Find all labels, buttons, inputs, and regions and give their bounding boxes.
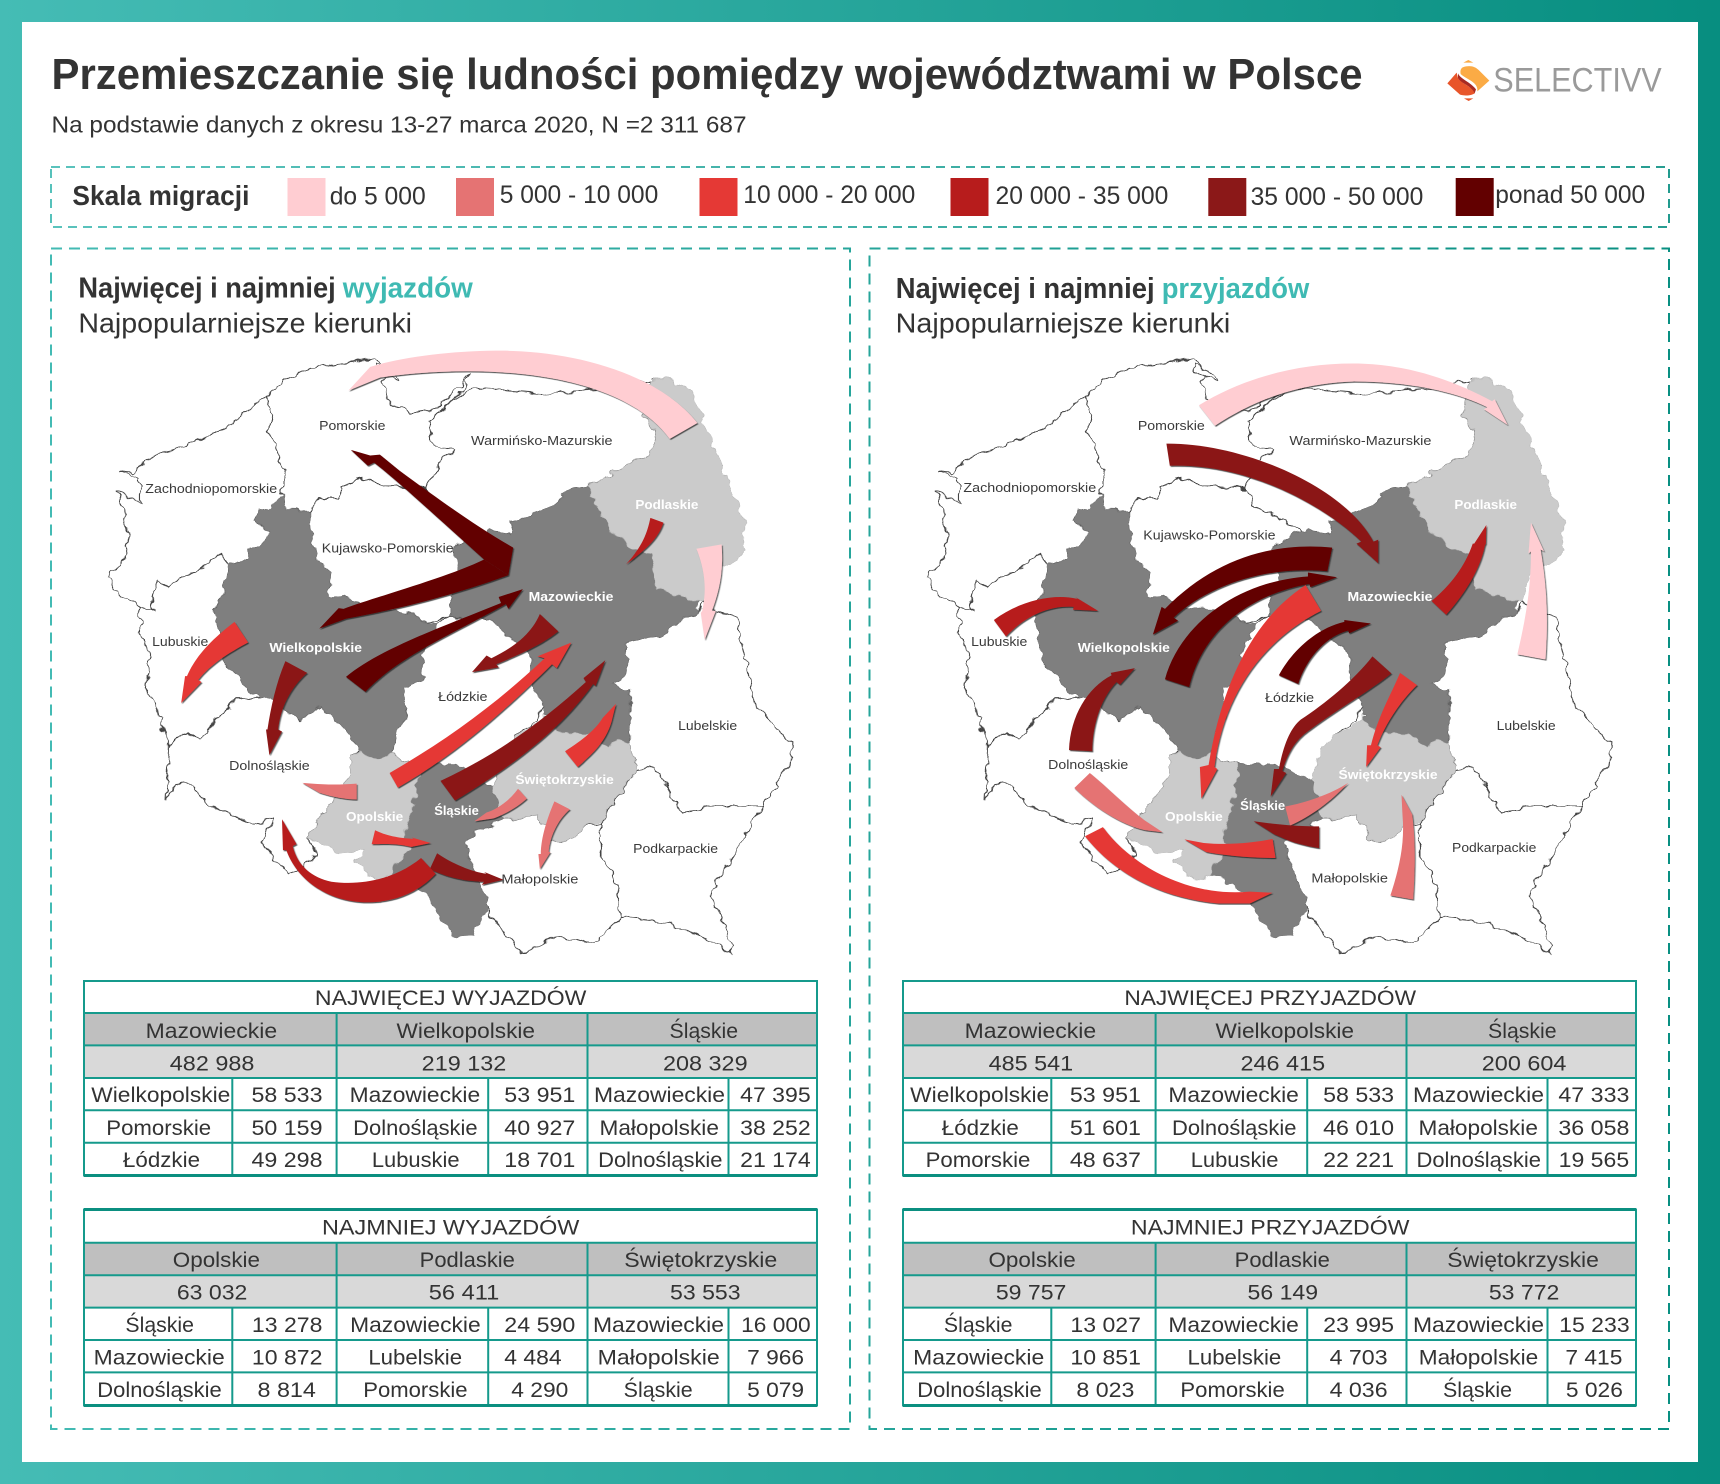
map labels: przyjazdy: Świętokrzyskie (1338, 767, 1438, 782)
table: najmniej wyjazdów: Dolnośląskie (97, 1379, 222, 1402)
table: najwięcej wyjazdów: Mazowieckie (146, 1020, 277, 1043)
table: najwięcej przyjazdów: Dolnośląskie (1172, 1117, 1296, 1140)
table: najmniej wyjazdów: NAJMNIEJ WYJAZDÓW (322, 1217, 580, 1240)
table: najwięcej wyjazdów: 49 298 (252, 1149, 322, 1172)
table: najwięcej przyjazdów: 53 951 (1070, 1084, 1141, 1107)
table: najmniej wyjazdów (84, 1210, 817, 1406)
table: najwięcej przyjazdów: Wielkopolskie (910, 1084, 1049, 1107)
table: najmniej przyjazdów: Podlaskie (1235, 1249, 1330, 1272)
map labels: wyjazdy: Podkarpackie (633, 841, 718, 856)
arrow: Mazowieckie to Śląskie (1271, 656, 1391, 797)
arrow: Wielkopolskie to Lubuskie (181, 622, 248, 703)
map labels: wyjazdy: Dolnośląskie (229, 758, 310, 773)
table: najmniej przyjazdów: Świętokrzyskie (1447, 1248, 1599, 1272)
heading: wyjazdy: Najpopularniejsze kierunki (78, 308, 412, 338)
logo: Selectivv (1447, 60, 1662, 101)
arrow: Opolskie to Dolnośląskie (302, 783, 357, 799)
table: najmniej wyjazdów: 53 553 (670, 1282, 741, 1305)
arrow: Śląskie to Opolskie (1184, 839, 1275, 858)
arrow: Opolskie to Mazowieckie (390, 642, 571, 788)
table: najwięcej przyjazdów: Wielkopolskie (1216, 1020, 1354, 1043)
arrow: Śląskie to Mazowieckie (440, 660, 605, 801)
map labels: przyjazdy: Kujawsko-Pomorskie (1143, 528, 1276, 542)
table: najwięcej przyjazdów: 485 541 (989, 1052, 1073, 1075)
map labels: wyjazdy: Podlaskie (635, 497, 698, 512)
map labels: wyjazdy (145, 418, 737, 886)
regions (108, 358, 792, 954)
table: najmniej wyjazdów: 8 814 (258, 1379, 316, 1402)
map labels: przyjazdy: Małopolskie (1311, 870, 1388, 886)
table: najmniej przyjazdów: 53 772 (1489, 1282, 1559, 1305)
map labels: przyjazdy: Śląskie (1240, 798, 1285, 813)
table: najmniej przyjazdów: Pomorskie (1180, 1379, 1285, 1402)
table: najmniej przyjazdów: NAJMNIEJ PRZYJAZDÓW (1131, 1217, 1410, 1240)
table: najwięcej wyjazdów: 53 951 (504, 1084, 575, 1107)
table: najwięcej wyjazdów: 50 159 (252, 1117, 322, 1140)
table: najwięcej wyjazdów: 21 174 (740, 1149, 811, 1172)
table: najmniej wyjazdów: 4 484 (504, 1347, 562, 1370)
arrow: Lubelskie to Podlaskie (1517, 523, 1547, 659)
arrow: Małopolskie to Śląskie (1254, 821, 1319, 848)
table: najmniej wyjazdów: 56 411 (429, 1282, 499, 1305)
title: Przemieszczanie się ludności pomiędzy województwami w Polsce (52, 50, 1362, 99)
table: najwięcej wyjazdów: Dolnośląskie (353, 1117, 478, 1140)
table: najmniej przyjazdów: 56 149 (1248, 1282, 1318, 1305)
table: najwięcej wyjazdów: 58 533 (252, 1084, 322, 1107)
map labels: przyjazdy: Podkarpackie (1452, 840, 1536, 855)
table: najmniej przyjazdów: 8 023 (1076, 1379, 1134, 1402)
map labels: przyjazdy: Mazowieckie (1348, 589, 1432, 604)
table: najmniej przyjazdów: Lubelskie (1188, 1347, 1281, 1370)
map labels: wyjazdy: Zachodniopomorskie (145, 481, 277, 496)
table: najmniej przyjazdów: 4 703 (1330, 1347, 1388, 1370)
table: najmniej wyjazdów: 63 032 (177, 1282, 247, 1305)
table: najwięcej wyjazdów: Wielkopolskie (397, 1020, 535, 1043)
table: najmniej wyjazdów: 7 966 (747, 1347, 804, 1370)
table: najwięcej przyjazdów: 47 333 (1558, 1084, 1629, 1107)
table: najmniej przyjazdów: Mazowieckie (1168, 1314, 1299, 1337)
table: najmniej przyjazdów: Dolnośląskie (917, 1379, 1042, 1402)
table: najmniej przyjazdów: Opolskie (988, 1249, 1076, 1272)
table: najmniej wyjazdów: Podlaskie (420, 1249, 515, 1272)
map labels: wyjazdy: Śląskie (434, 803, 479, 818)
table: najwięcej wyjazdów: Lubuskie (372, 1149, 460, 1172)
panel: przyjazdy (870, 248, 1669, 1429)
legend item: ponad 50 000: ponad 50 000 (1495, 181, 1645, 209)
table: najmniej przyjazdów: Mazowieckie (913, 1347, 1044, 1370)
heading: wyjazdy: Najwięcej i najmniej (78, 273, 336, 305)
arrows (994, 364, 1547, 903)
table: najwięcej przyjazdów: 46 010 (1323, 1117, 1394, 1140)
map labels: wyjazdy: Lubelskie (678, 718, 737, 733)
table: najwięcej przyjazdów: Dolnośląskie (1416, 1149, 1541, 1172)
table: najwięcej przyjazdów: Mazowieckie (1413, 1084, 1544, 1107)
arrow: Pomorskie to Podlaskie (1199, 364, 1508, 426)
heading: wyjazdy: wyjazdów (342, 273, 474, 305)
table: najwięcej przyjazdów: Lubuskie (1191, 1149, 1278, 1172)
table: najmniej przyjazdów: 7 415 (1565, 1347, 1622, 1370)
table: najwięcej wyjazdów: 40 927 (504, 1117, 575, 1140)
legend panel: Skala migracji (51, 167, 1669, 227)
arrow: Mazowieckie to Wielkopolskie (319, 559, 508, 629)
table: najmniej przyjazdów: 59 757 (996, 1282, 1066, 1305)
arrows (181, 351, 722, 902)
table: najwięcej przyjazdów: 22 221 (1323, 1149, 1394, 1172)
table: najwięcej przyjazdów: 51 601 (1070, 1117, 1141, 1140)
table: najmniej przyjazdów (903, 1210, 1636, 1406)
arrow: Pomorskie to Mazowieckie (1166, 444, 1378, 563)
table: najwięcej wyjazdów: Małopolskie (600, 1117, 719, 1140)
arrow: Mazowieckie to Wielkopolskie (1153, 546, 1332, 635)
table: najwięcej wyjazdów: Łódzkie (123, 1149, 200, 1172)
arrow: Dolnośląskie to Wielkopolskie (1069, 668, 1135, 751)
table: najmniej wyjazdów: 16 000 (741, 1314, 811, 1337)
table: najmniej przyjazdów: 15 233 (1559, 1314, 1630, 1337)
arrow: Wielkopolskie to Mazowieckie (1165, 572, 1337, 687)
table: najmniej wyjazdów: Śląskie (125, 1313, 194, 1337)
map labels: przyjazdy: Wielkopolskie (1078, 640, 1170, 655)
table: najmniej przyjazdów: 5 026 (1566, 1379, 1623, 1402)
map labels: przyjazdy: Pomorskie (1138, 418, 1205, 433)
heading: przyjazdy: przyjazdów (1162, 273, 1310, 305)
arrow: Świętokrzyskie to Śląskie (1285, 783, 1348, 826)
map labels: wyjazdy: Lubuskie (152, 634, 208, 649)
arrow: Świętokrzyskie to Małopolskie (538, 801, 570, 869)
heading: wyjazdy (78, 273, 474, 338)
table: najmniej wyjazdów: Mazowieckie (94, 1347, 225, 1370)
table: najwięcej wyjazdów: Mazowieckie (594, 1084, 725, 1107)
map: przyjazdy (927, 358, 1611, 954)
legend item: 5 000 - 10 000: 5 000 - 10 000 (500, 181, 658, 209)
arrow: Opolskie to Śląskie (372, 830, 431, 847)
legend title: Skala migracji (72, 180, 249, 211)
arrow: Mazowieckie to Pomorskie (351, 450, 513, 575)
arrow: Świętokrzyskie to Śląskie (474, 789, 527, 821)
map: wyjazdy (108, 351, 792, 954)
map labels: przyjazdy: Warmińsko-Mazurskie (1289, 433, 1431, 448)
table: najmniej wyjazdów: Mazowieckie (350, 1314, 481, 1337)
arrow: Wielkopolskie to Mazowieckie (346, 589, 523, 692)
table: najmniej wyjazdów: Śląskie (624, 1378, 693, 1402)
table: najmniej wyjazdów: 4 290 (511, 1379, 568, 1402)
arrow: Podlaskie to Lubelskie (696, 544, 722, 640)
logo: Selectivv: SELECTIVV (1493, 62, 1662, 100)
arrow: Mazowieckie to Opolskie (1200, 585, 1321, 799)
arrow: Dolnośląskie to Śląskie (1085, 827, 1273, 903)
table: najwięcej przyjazdów: 19 565 (1559, 1149, 1629, 1172)
arrow: Świętokrzyskie to Mazowieckie (565, 704, 616, 767)
map labels: wyjazdy: Mazowieckie (529, 589, 613, 604)
table: najmniej przyjazdów: Mazowieckie (1413, 1314, 1544, 1337)
arrow: Podlaskie to Mazowieckie (626, 518, 663, 564)
table: najwięcej wyjazdów: 482 988 (170, 1052, 254, 1075)
arrow: Śląskie to Małopolskie (430, 853, 504, 885)
table: najwięcej wyjazdów: Wielkopolskie (91, 1084, 230, 1107)
table: najmniej wyjazdów: 10 872 (252, 1347, 322, 1370)
map labels: wyjazdy: Łódzkie (438, 689, 487, 704)
table: najwięcej przyjazdów: 36 058 (1558, 1117, 1629, 1140)
map labels: wyjazdy: Pomorskie (319, 418, 385, 433)
table: najwięcej przyjazdów: Pomorskie (926, 1149, 1030, 1172)
table: najwięcej wyjazdów: 208 329 (663, 1052, 748, 1075)
table: najmniej wyjazdów: Opolskie (173, 1249, 260, 1272)
table: najwięcej przyjazdów: Mazowieckie (965, 1020, 1096, 1043)
arrow: Dolnośląskie to Opolskie (1074, 773, 1163, 832)
table: najwięcej przyjazdów: 246 415 (1240, 1052, 1325, 1075)
arrow: Wielkopolskie to Dolnośląskie (266, 661, 307, 755)
arrow: Mazowieckie to Podlaskie (1432, 525, 1486, 615)
table: najmniej przyjazdów: Śląskie (1443, 1378, 1512, 1402)
heading: przyjazdy: Najwięcej i najmniej (896, 273, 1155, 305)
table: najwięcej wyjazdów: Śląskie (670, 1019, 738, 1043)
legend item: ponad 50 000 (1456, 178, 1645, 216)
heading: przyjazdy: Najpopularniejsze kierunki (896, 308, 1230, 338)
table: najwięcej przyjazdów: 200 604 (1482, 1052, 1567, 1075)
table: najwięcej przyjazdów: Małopolskie (1418, 1117, 1538, 1140)
table: najmniej przyjazdów: 10 851 (1070, 1347, 1141, 1370)
legend item: do 5 000: do 5 000 (330, 182, 426, 210)
heading: przyjazdy (896, 273, 1310, 338)
table: najwięcej wyjazdów (84, 981, 817, 1176)
legend item: 10 000 - 20 000: 10 000 - 20 000 (743, 181, 915, 209)
table: najmniej przyjazdów: 4 036 (1330, 1379, 1388, 1402)
table: najwięcej przyjazdów: 58 533 (1323, 1084, 1394, 1107)
table: najwięcej wyjazdów: Mazowieckie (350, 1084, 480, 1107)
table: najmniej wyjazdów: Lubelskie (368, 1347, 462, 1370)
map labels: wyjazdy: Małopolskie (501, 872, 578, 886)
arrow: Małopolskie to Świętokrzyskie (1390, 795, 1415, 899)
table: najwięcej wyjazdów: 38 252 (740, 1117, 811, 1140)
table: najwięcej przyjazdów: Łódzkie (942, 1117, 1019, 1140)
table: najmniej wyjazdów: 24 590 (504, 1314, 575, 1337)
table: najmniej przyjazdów: Małopolskie (1419, 1347, 1538, 1370)
table: najmniej wyjazdów: Świętokrzyskie (624, 1248, 777, 1272)
map labels: przyjazdy (963, 418, 1556, 886)
table: najmniej wyjazdów: Mazowieckie (593, 1314, 724, 1337)
panel: wyjazdy (51, 248, 850, 1429)
table: najmniej wyjazdów: 13 278 (252, 1314, 322, 1337)
table: najmniej wyjazdów: 5 079 (747, 1379, 804, 1402)
arrow: Śląskie to Dolnośląskie (282, 819, 436, 902)
table: najwięcej przyjazdów (903, 981, 1636, 1176)
map labels: przyjazdy: Podlaskie (1454, 497, 1517, 512)
table: najmniej przyjazdów: 13 027 (1070, 1314, 1141, 1337)
table: najmniej wyjazdów: Małopolskie (598, 1347, 720, 1370)
table: najwięcej wyjazdów: 18 701 (504, 1149, 575, 1172)
legend item: 5 000 - 10 000 (456, 178, 658, 216)
legend item: 10 000 - 20 000 (700, 178, 915, 216)
table: najwięcej przyjazdów: NAJWIĘCEJ PRZYJAZDÓW (1124, 987, 1416, 1010)
map labels: przyjazdy: Zachodniopomorskie (963, 480, 1096, 495)
legend item: 20 000 - 35 000: 20 000 - 35 000 (996, 182, 1168, 210)
legend item: 20 000 - 35 000 (950, 178, 1168, 216)
map labels: przyjazdy: Łódzkie (1265, 690, 1314, 705)
arrow: Podlaskie to Pomorskie (348, 351, 697, 439)
legend item: 35 000 - 50 000 (1208, 178, 1423, 216)
arrow: Łódzkie to Mazowieckie (1279, 620, 1371, 684)
table: najwięcej wyjazdów: NAJWIĘCEJ WYJAZDÓW (315, 987, 587, 1010)
table: najwięcej wyjazdów: Pomorskie (106, 1117, 211, 1140)
map labels: przyjazdy: Dolnośląskie (1048, 757, 1128, 772)
table: najmniej przyjazdów: Śląskie (944, 1313, 1012, 1337)
subtitle: Na podstawie danych z okresu 13-27 marca 2020, N =2 311 687 (52, 112, 746, 138)
arrow: Mazowieckie to Świętokrzyskie (1366, 673, 1417, 767)
map labels: wyjazdy: Warmińsko-Mazurskie (471, 433, 613, 448)
arrow: Lubuskie to Wielkopolskie (994, 597, 1098, 637)
regions (927, 358, 1611, 954)
map labels: wyjazdy: Kujawsko-Pomorskie (322, 540, 454, 556)
map labels: przyjazdy: Lubuskie (971, 634, 1027, 649)
map labels: przyjazdy: Opolskie (1165, 809, 1223, 824)
table: najwięcej przyjazdów: 48 637 (1070, 1149, 1141, 1172)
table: najwięcej wyjazdów: Dolnośląskie (598, 1149, 722, 1172)
map labels: przyjazdy: Lubelskie (1497, 718, 1556, 733)
table: najwięcej przyjazdów: Mazowieckie (1168, 1084, 1299, 1107)
legend item: 35 000 - 50 000: 35 000 - 50 000 (1251, 183, 1423, 211)
map labels: wyjazdy: Opolskie (346, 809, 403, 824)
table: najmniej przyjazdów: 23 995 (1323, 1314, 1394, 1337)
arrow: Mazowieckie to Łódzkie (472, 614, 558, 672)
legend item: do 5 000 (288, 178, 426, 216)
table: najmniej wyjazdów: Pomorskie (363, 1379, 468, 1402)
map labels: wyjazdy: Wielkopolskie (269, 640, 362, 655)
table: najwięcej przyjazdów: Śląskie (1488, 1019, 1557, 1043)
table: najwięcej wyjazdów: 219 132 (422, 1052, 506, 1075)
table: najwięcej wyjazdów: 47 395 (740, 1084, 811, 1107)
map labels: wyjazdy: Świętokrzyskie (515, 772, 614, 787)
